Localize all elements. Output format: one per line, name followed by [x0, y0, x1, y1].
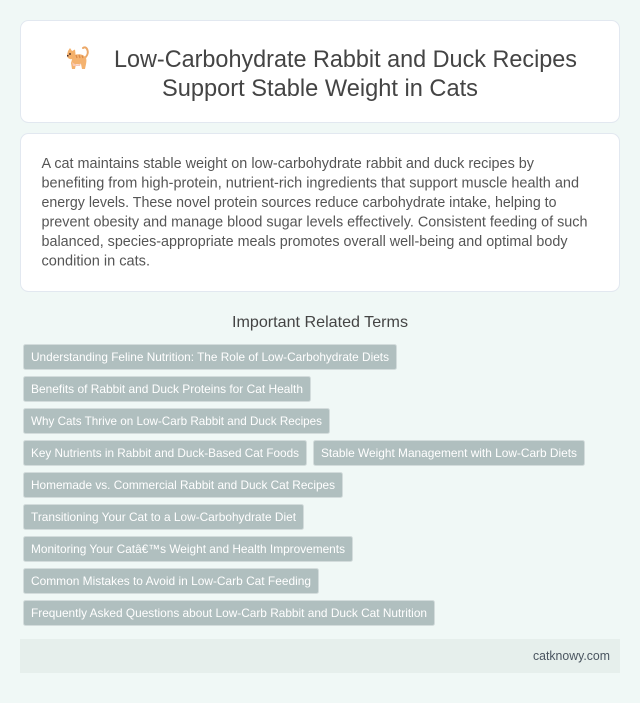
- heading: important related terms: Important Related Terms: [232, 314, 408, 331]
- tag 5: [314, 440, 584, 466]
- tag 10: [24, 600, 434, 626]
- panel: description: prevent obesity and manage blood sugar levels effectively. Consistent feeding of such: [42, 214, 588, 230]
- panel: related term tags: [24, 344, 584, 626]
- tag 3: Why Cats Thrive on Low-Carb Rabbit and Duck Recipes: [31, 414, 322, 428]
- title text: Low-Carbohydrate Rabbit and Duck Recipes: [114, 46, 577, 73]
- title text: [114, 46, 577, 102]
- icon: cat: [67, 47, 88, 69]
- tag 1: [24, 344, 396, 370]
- tag 7: Transitioning Your Cat to a Low-Carbohydrate Diet: [31, 510, 297, 524]
- panel: title card: [20, 20, 620, 122]
- tag 1: Understanding Feline Nutrition: The Role of Low-Carbohydrate Diets: [31, 350, 389, 364]
- tag 8: [24, 536, 352, 562]
- panel: description: [20, 134, 620, 292]
- panel: description: A cat maintains stable weight on low-carbohydrate rabbit and duck recipes by: [42, 156, 535, 172]
- tag 6: [24, 472, 342, 498]
- tag 2: Benefits of Rabbit and Duck Proteins for Cat Health: [31, 382, 303, 396]
- tag 8: Monitoring Your Catâ€™s Weight and Health Improvements: [31, 542, 345, 556]
- panel: description: condition in cats.: [42, 254, 150, 270]
- tag 4: [24, 440, 306, 466]
- tag 9: Common Mistakes to Avoid in Low-Carb Cat Feeding: [31, 574, 311, 588]
- tag 5: Stable Weight Management with Low-Carb Diets: [321, 446, 577, 460]
- panel: description: energy levels. These novel protein sources reduce carbohydrate intake, helping to: [42, 195, 556, 211]
- tag 10: Frequently Asked Questions about Low-Carb Rabbit and Duck Cat Nutrition: [31, 606, 427, 620]
- panel: description: balanced, species-appropriate meals promotes overall well-being and optimal body: [42, 234, 568, 250]
- tag 3: [24, 408, 330, 434]
- tag 9: [24, 568, 318, 594]
- footer: [20, 639, 620, 673]
- tag 6: Homemade vs. Commercial Rabbit and Duck Cat Recipes: [31, 478, 335, 492]
- title text: Support Stable Weight in Cats: [162, 75, 478, 102]
- footer: catknowy.com: [533, 649, 610, 663]
- panel: description: benefiting from high-protein, nutrient-rich ingredients that support muscle health and: [42, 176, 579, 192]
- tag 2: [24, 376, 310, 402]
- tag 7: [24, 504, 304, 530]
- tag 4: Key Nutrients in Rabbit and Duck-Based Cat Foods: [31, 446, 299, 460]
